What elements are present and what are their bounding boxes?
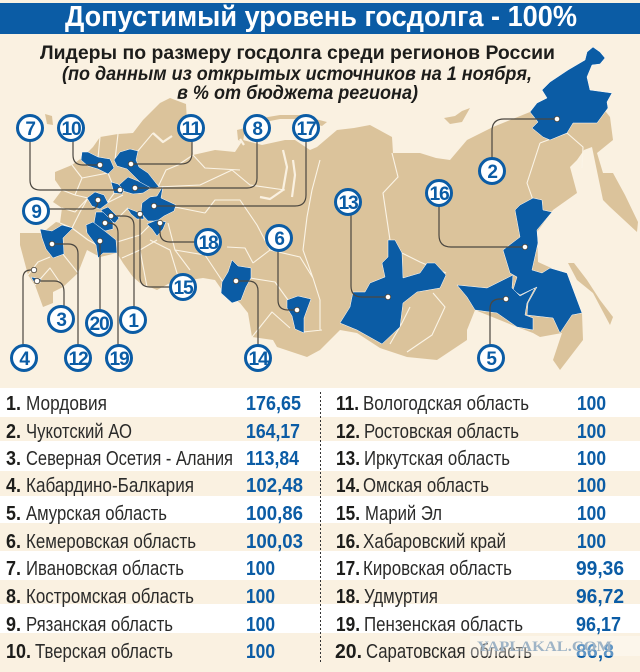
ranking table right column: 99,36 bbox=[576, 558, 624, 580]
ranking table right column: Удмуртия bbox=[364, 586, 438, 608]
badge 14 bbox=[246, 346, 270, 370]
ranking table left column: 100 bbox=[246, 641, 275, 663]
ranking table left column: Кемеровская область bbox=[26, 531, 196, 553]
ranking table right column: Ростовская область bbox=[364, 421, 519, 443]
subtitle: в % от бюджета региона) bbox=[177, 82, 418, 104]
badge 19: 19 bbox=[110, 349, 129, 370]
ranking table left column: 8. bbox=[6, 586, 21, 608]
badge 5 bbox=[478, 346, 504, 370]
ranking table right column: 19. bbox=[336, 614, 360, 636]
ranking table left column: 100 bbox=[246, 558, 275, 580]
region: Vologda bbox=[114, 149, 159, 189]
table background rows bbox=[0, 388, 640, 633]
badge 20: 20 bbox=[90, 314, 109, 335]
ranking table left column: Рязанская область bbox=[26, 614, 173, 636]
ranking table right column: 96,72 bbox=[576, 586, 624, 608]
subtitle: Лидеры по размеру госдолга среди регионов России bbox=[40, 42, 555, 64]
subtitle: (по данным из открытых источников на 1 ноября, bbox=[62, 63, 532, 85]
watermark bbox=[470, 636, 640, 656]
badge 7: 7 bbox=[25, 119, 35, 140]
ranking table right column: 12. bbox=[336, 421, 360, 443]
ranking table right column: Хабаровский край bbox=[363, 531, 506, 553]
badge 12: 12 bbox=[68, 349, 88, 370]
ranking table left column: 6. bbox=[6, 531, 21, 553]
badge 6 bbox=[266, 226, 292, 250]
ranking table right column: 100 bbox=[577, 421, 606, 443]
gulfs bbox=[153, 133, 295, 199]
ranking table right column: 17. bbox=[336, 558, 360, 580]
Arctic islands bbox=[45, 108, 470, 142]
ranking table left column: 1. bbox=[6, 393, 21, 415]
region: Mordovia bbox=[101, 207, 119, 223]
ranking table right column: 20. bbox=[335, 641, 362, 663]
region: Ryazan bbox=[87, 192, 108, 209]
region: Mari El bbox=[127, 208, 144, 219]
ranking table right column: 86,8 bbox=[576, 641, 614, 663]
badge 11 bbox=[178, 116, 204, 140]
badge 7 bbox=[18, 116, 42, 140]
region: Rostov bbox=[40, 225, 73, 258]
region: North Caucasus bbox=[31, 277, 41, 283]
ranking table left column: 113,84 bbox=[246, 448, 300, 470]
ranking table left column: 3. bbox=[6, 448, 21, 470]
badge 6: 6 bbox=[274, 229, 284, 250]
ranking table left column: 10. bbox=[6, 641, 31, 663]
badge 15: 15 bbox=[174, 278, 194, 299]
ranking table left column: 9. bbox=[6, 614, 21, 636]
badge 17: 17 bbox=[296, 119, 316, 140]
ranking table left column: 2. bbox=[6, 421, 21, 443]
region: Kirov bbox=[141, 186, 176, 221]
ranking table right column: 18. bbox=[336, 586, 360, 608]
badge 1 bbox=[120, 308, 146, 332]
region: Saratov bbox=[86, 222, 117, 258]
ranking table left column: Мордовия bbox=[26, 393, 107, 415]
badge 9 bbox=[24, 198, 48, 224]
region borders bbox=[28, 133, 583, 352]
ranking table left column: Кабардино-Балкария bbox=[26, 475, 194, 497]
badge 2: 2 bbox=[487, 162, 497, 183]
ranking table right column: Омская область bbox=[363, 475, 489, 497]
badge 10 bbox=[58, 116, 84, 140]
badge 13: 13 bbox=[338, 193, 358, 214]
ranking table left column: 100 bbox=[246, 614, 275, 636]
ranking table right column: 100 bbox=[577, 448, 606, 470]
ranking table left column: Северная Осетия - Алания bbox=[26, 448, 233, 470]
ranking table right column: 13. bbox=[336, 448, 360, 470]
badge 2 bbox=[480, 158, 504, 184]
ranking table right column: Иркутская область bbox=[364, 448, 510, 470]
subtitle bbox=[40, 42, 555, 104]
badge 15 bbox=[170, 274, 196, 300]
leader lines bbox=[23, 119, 557, 345]
badge 1: 1 bbox=[128, 311, 139, 332]
badge 17 bbox=[294, 116, 318, 140]
ranking table left column: 102,48 bbox=[246, 475, 303, 497]
badge 14: 14 bbox=[248, 349, 269, 370]
ranking table right column: 100 bbox=[577, 531, 606, 553]
ranking table right column: 100 bbox=[577, 475, 606, 497]
region: Omsk bbox=[221, 260, 251, 303]
badge 19 bbox=[106, 346, 132, 370]
ranking table right column: 11. bbox=[336, 393, 359, 415]
ranking table right column: 100 bbox=[577, 393, 606, 415]
badge 11: 11 bbox=[182, 119, 202, 140]
ranking table left column: 176,65 bbox=[246, 393, 301, 415]
region: Khabarovsk bbox=[503, 198, 582, 333]
column divider bbox=[320, 392, 322, 662]
badge 18 bbox=[196, 230, 220, 254]
ranking table left column: Чукотский АО bbox=[26, 421, 132, 443]
badge 3 bbox=[48, 306, 74, 332]
ranking table left column: 5. bbox=[6, 503, 21, 525]
region: Penza bbox=[94, 212, 113, 231]
badge 4: 4 bbox=[19, 349, 30, 370]
ranking table left column: 100,86 bbox=[246, 503, 303, 525]
badge 13 bbox=[336, 190, 360, 214]
ranking table left column: Тверская область bbox=[35, 641, 173, 663]
badge 12 bbox=[66, 346, 90, 370]
badge 3: 3 bbox=[56, 310, 66, 331]
ranking table left column bbox=[6, 393, 303, 663]
badge 8: 8 bbox=[252, 119, 262, 140]
ranking table left column: Амурская область bbox=[26, 503, 167, 525]
ranking table right column bbox=[335, 393, 624, 663]
ranking table right column: 96,17 bbox=[576, 614, 621, 636]
ranking table right column: Пензенская область bbox=[364, 614, 523, 636]
badge 9: 9 bbox=[31, 202, 41, 223]
region: Irkutsk bbox=[340, 240, 446, 344]
map of Russia bbox=[20, 47, 638, 370]
badge 4 bbox=[12, 346, 36, 370]
badge 5: 5 bbox=[486, 349, 497, 370]
region: Chukotka bbox=[530, 47, 612, 140]
number badges bbox=[12, 116, 504, 370]
badge 16 bbox=[426, 180, 452, 206]
ranking table right column: Саратовская область bbox=[366, 641, 532, 663]
ranking table left column: 100,03 bbox=[246, 531, 303, 553]
ranking table right column: 15. bbox=[336, 503, 360, 525]
badge 8 bbox=[244, 116, 270, 140]
region: Amur bbox=[457, 275, 535, 330]
ranking table left column: 4. bbox=[6, 475, 21, 497]
ranking table left column: 164,17 bbox=[246, 421, 300, 443]
region: Udmurtia bbox=[147, 220, 166, 236]
region: Ivanovo bbox=[111, 182, 124, 194]
ranking table right column: 16. bbox=[336, 531, 360, 553]
ranking table left column: 100 bbox=[246, 586, 275, 608]
watermark: YAPLAKAL.COM bbox=[477, 639, 612, 655]
title: Допустимый уровень госдолга - 100% bbox=[65, 1, 577, 33]
region: Kemerovo bbox=[287, 296, 311, 333]
Sakhalin bbox=[568, 263, 613, 325]
ranking table right column: 100 bbox=[577, 503, 606, 525]
badge 20 bbox=[86, 310, 112, 336]
ranking table left column: 7. bbox=[6, 558, 21, 580]
ranking table left column: Ивановская область bbox=[26, 558, 184, 580]
ranking table left column: Костромская область bbox=[26, 586, 194, 608]
region: Kostroma bbox=[119, 177, 151, 194]
badge 10: 10 bbox=[62, 119, 81, 140]
badge 18: 18 bbox=[198, 233, 218, 254]
badge 16: 16 bbox=[430, 184, 449, 205]
ranking table right column: Кировская область bbox=[363, 558, 512, 580]
ranking table right column: Марий Эл bbox=[365, 503, 442, 525]
ranking table right column: Вологодская область bbox=[363, 393, 529, 415]
ranking table right column: 14. bbox=[336, 475, 360, 497]
region dots bbox=[31, 116, 560, 313]
region: Tver bbox=[81, 152, 114, 174]
